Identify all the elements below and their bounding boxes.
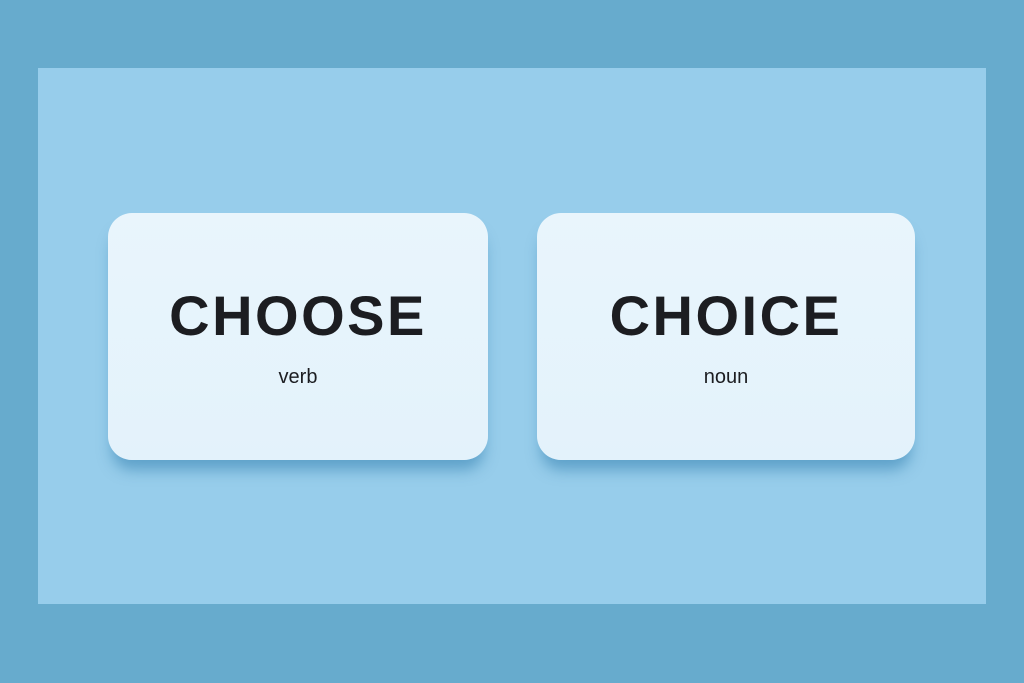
card: choose	[108, 213, 488, 460]
word: CHOOSE: CHOOSE	[169, 284, 427, 347]
card: choice	[537, 213, 915, 460]
part of speech: noun: noun	[704, 366, 748, 388]
background panel	[38, 68, 986, 604]
word: CHOICE: CHOICE	[610, 284, 842, 347]
part of speech: verb: verb	[279, 366, 317, 388]
